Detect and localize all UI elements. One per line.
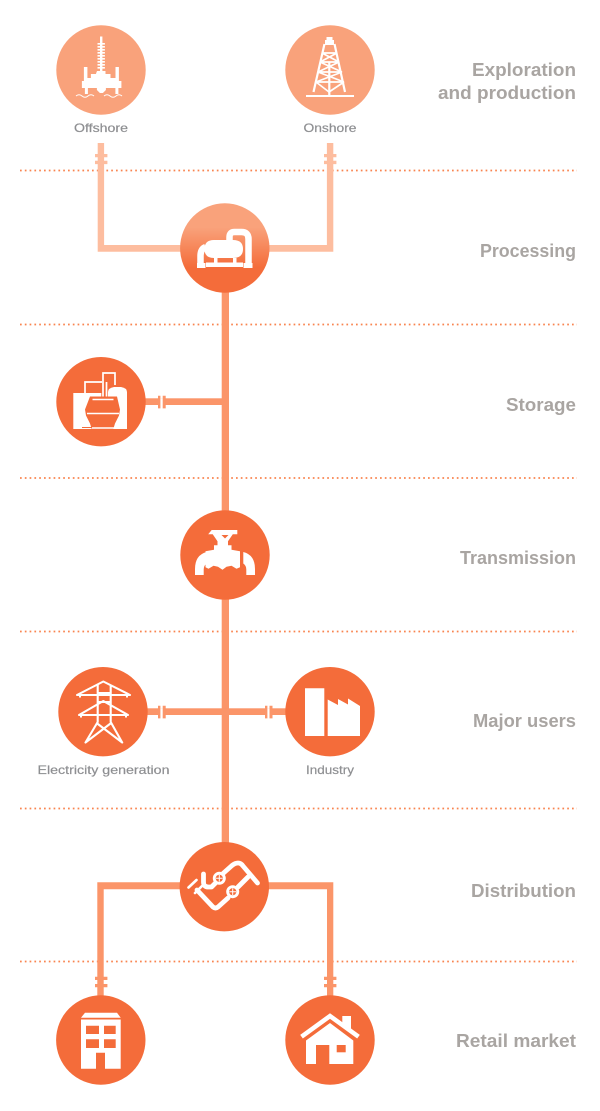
icon: offshore platform [56, 25, 146, 115]
heading: Exploration and production: Exploration [472, 60, 576, 80]
label: Offshore: Offshore [74, 121, 128, 135]
heading: Distribution: Distribution [471, 881, 576, 901]
icon: electricity pylon [58, 667, 148, 756]
icon: processing plant [180, 203, 270, 293]
icon: transmission valve [180, 510, 270, 600]
label: Industry: Industry [306, 763, 354, 777]
icon: onshore derrick [285, 25, 375, 115]
heading: Major users: Major users [473, 711, 576, 731]
pipes: main line and branches [95, 285, 336, 1005]
icon: storage tanks [56, 357, 146, 446]
heading: Processing: Processing [480, 241, 576, 261]
icon: industry factory [285, 667, 375, 756]
label: Electricity generation: Electricity generation [38, 763, 170, 777]
icon: distribution pipes [180, 842, 269, 931]
icon: apartment building [56, 995, 145, 1085]
heading: Transmission: Transmission [460, 548, 576, 568]
label: Onshore: Onshore [304, 121, 357, 135]
pipes: upstream connections to processing [95, 143, 336, 252]
heading: Retail market: Retail market [456, 1031, 576, 1051]
heading: Storage: Storage [506, 395, 576, 415]
heading: and production: and production [438, 83, 576, 103]
icon: house [285, 995, 375, 1085]
